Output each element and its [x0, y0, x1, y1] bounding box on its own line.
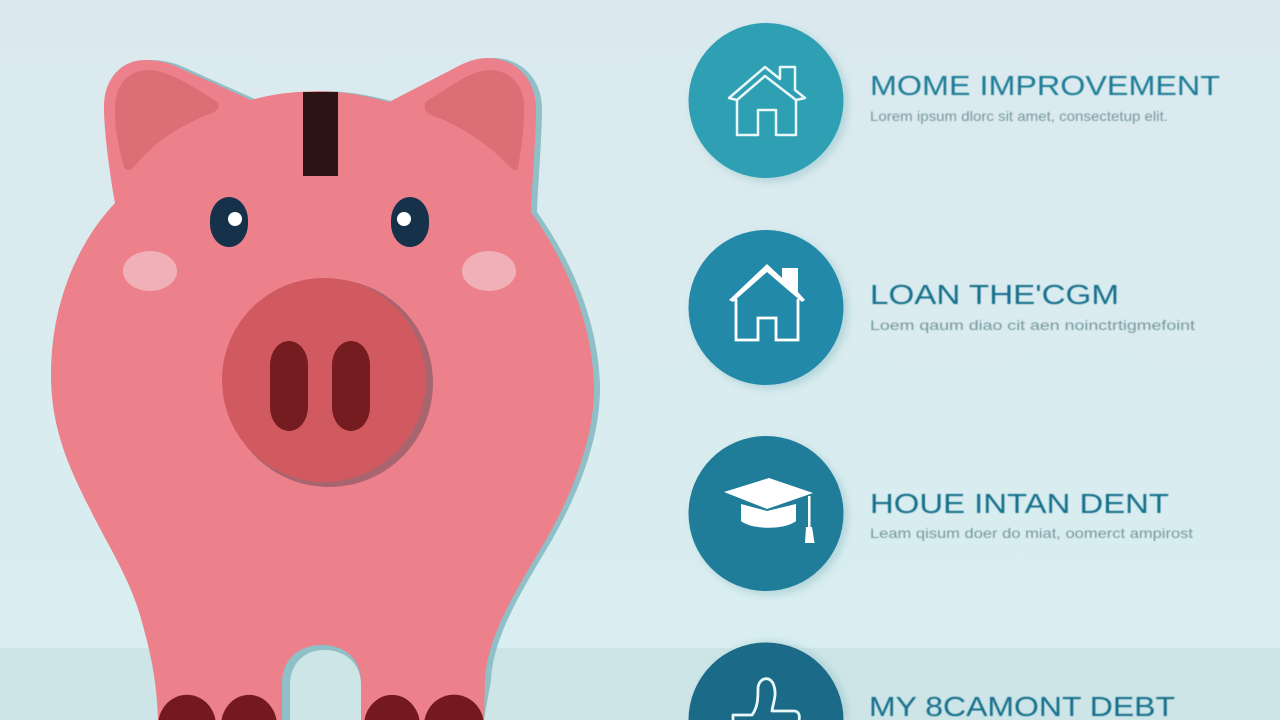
snout — [222, 278, 433, 487]
right inner ear — [425, 70, 524, 170]
teal circle 1 — [688, 23, 844, 178]
floor band — [0, 648, 1280, 720]
teal circle 3 — [688, 436, 844, 591]
heading 3: HOUE INTAN DENT — [870, 488, 1169, 519]
item: loan — [688, 230, 1195, 389]
pig body — [51, 58, 594, 720]
description 1: Lorem ipsum dlorc sit amet, consectetup elit. — [870, 108, 1168, 124]
description 2: Loem qaum diao cit aen noinctrtigmefoint — [870, 317, 1195, 333]
left cheek — [123, 251, 177, 291]
icon: graduation cap — [724, 478, 814, 543]
right cheek — [462, 251, 516, 291]
piggy bank illustration — [51, 58, 600, 720]
icon: outlined house — [729, 67, 805, 135]
gap between the legs — [282, 645, 361, 720]
left nostril — [270, 341, 308, 431]
heading 2: LOAN THE'CGM — [870, 279, 1119, 310]
teal circle 2 — [688, 230, 844, 385]
hooves — [158, 695, 484, 720]
teal circle 4 — [688, 642, 844, 720]
icon: thumbs up — [733, 679, 799, 720]
item: debt — [688, 642, 1175, 720]
description 3: Leam qisum doer do miat, oomerct ampirost — [870, 525, 1193, 541]
left inner ear — [115, 70, 219, 170]
icon: house with chimney — [729, 264, 805, 340]
coin slot — [303, 92, 338, 176]
right nostril — [332, 341, 370, 431]
left eye — [210, 197, 248, 247]
item: house — [688, 436, 1193, 595]
pig body shadow — [57, 58, 600, 720]
heading 1: MOME IMPROVEMENT — [870, 70, 1220, 101]
right eye — [391, 197, 429, 247]
item: home improvement — [688, 23, 1220, 182]
